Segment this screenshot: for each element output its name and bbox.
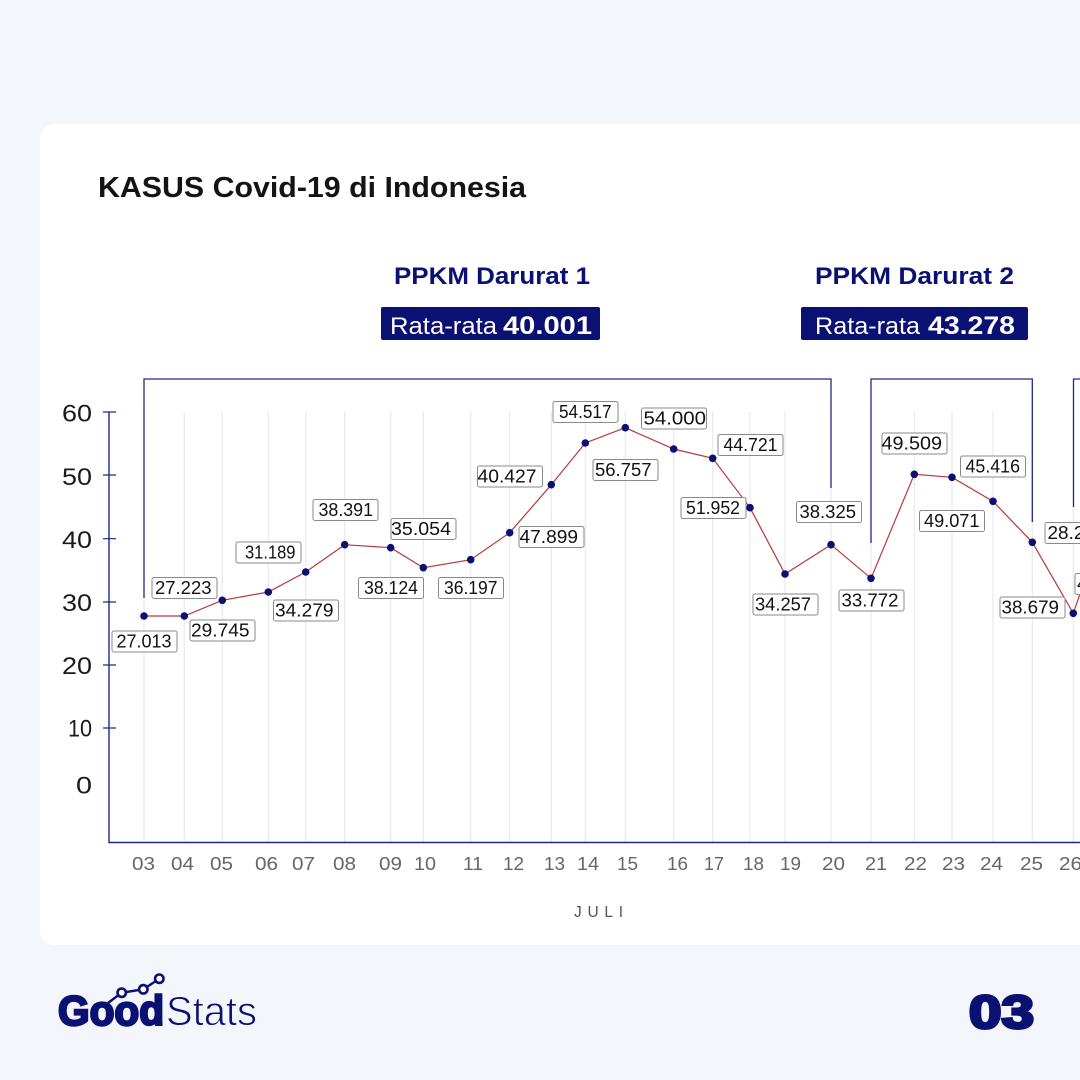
y axis: 40 bbox=[62, 527, 92, 554]
x axis labels: 10 bbox=[414, 853, 436, 874]
data labels: 44.721 bbox=[724, 435, 778, 455]
data labels: 56.757 bbox=[595, 460, 652, 480]
x axis labels: 06 bbox=[255, 853, 278, 874]
panel: chart card bbox=[40, 124, 1080, 945]
data labels: 49.071 bbox=[924, 511, 980, 531]
page number: 03 bbox=[969, 986, 1034, 1038]
heading: PPKM Darurat 1: 40.001 bbox=[503, 312, 592, 340]
data labels: 51.952 bbox=[686, 498, 740, 518]
x axis labels: 25 bbox=[1020, 853, 1043, 874]
data labels: 34.257 bbox=[755, 594, 811, 614]
x axis labels: 09 bbox=[379, 853, 402, 874]
x axis labels: 26 bbox=[1059, 853, 1080, 874]
heading: PPKM Darurat 2: PPKM Darurat 2 bbox=[815, 263, 1014, 290]
data labels: 27.223 bbox=[155, 578, 212, 598]
x axis labels: 08 bbox=[333, 853, 356, 874]
y axis bbox=[62, 400, 1080, 842]
logo: GoodStats bbox=[58, 974, 257, 1034]
title: KASUS Covid-19 di Indonesia bbox=[98, 172, 527, 204]
y axis: 20 bbox=[62, 653, 92, 680]
data line bbox=[144, 428, 1080, 616]
bracket: next period bbox=[1074, 379, 1080, 507]
heading: PPKM Darurat 1 bbox=[381, 263, 600, 340]
heading: PPKM Darurat 1: Rata-rata bbox=[390, 313, 498, 340]
x axis labels: 12 bbox=[503, 853, 524, 874]
y axis: 30 bbox=[62, 590, 92, 617]
x axis labels: 23 bbox=[942, 853, 965, 874]
data labels: 38.325 bbox=[800, 502, 856, 522]
data labels: 38.391 bbox=[318, 500, 373, 520]
data labels: 38.124 bbox=[364, 578, 418, 598]
data labels bbox=[112, 402, 1080, 652]
bracket: PPKM Darurat 2 period bbox=[871, 379, 1032, 543]
bracket: PPKM Darurat 1 period bbox=[144, 379, 831, 598]
data labels: 40.427 bbox=[478, 466, 536, 486]
x axis labels: 14 bbox=[577, 853, 599, 874]
x axis labels: 13 bbox=[544, 853, 565, 874]
y axis: 60 bbox=[62, 400, 92, 428]
heading: PPKM Darurat 2: 43.278 bbox=[928, 312, 1015, 340]
x axis labels: 17 bbox=[704, 853, 724, 874]
data labels: 54.000 bbox=[644, 408, 706, 428]
data labels: 34.279 bbox=[275, 600, 334, 620]
data labels: 27.013 bbox=[116, 632, 172, 652]
y axis: 0 bbox=[76, 772, 92, 800]
x axis labels: 19 bbox=[780, 853, 801, 874]
x axis labels: 20 bbox=[822, 853, 845, 874]
data labels: 49.509 bbox=[882, 434, 942, 454]
x axis labels: 05 bbox=[210, 853, 233, 874]
x axis labels: 15 bbox=[617, 853, 638, 874]
data labels: 54.517 bbox=[559, 402, 612, 422]
heading: PPKM Darurat 2: Rata-rata bbox=[815, 313, 921, 340]
data labels: 33.772 bbox=[842, 590, 898, 610]
x axis labels: 16 bbox=[667, 853, 688, 874]
data labels: 36.197 bbox=[444, 578, 498, 598]
data labels: 29.745 bbox=[191, 620, 250, 640]
data labels: 45.416 bbox=[966, 456, 1020, 476]
x axis labels: 24 bbox=[980, 853, 1003, 874]
data labels: 35.054 bbox=[391, 519, 451, 539]
data labels: 47.899 bbox=[520, 527, 578, 547]
x axis labels: 07 bbox=[292, 853, 315, 874]
x axis labels bbox=[132, 853, 1080, 874]
data labels: 38.679 bbox=[1002, 598, 1059, 618]
x axis labels: 21 bbox=[865, 853, 887, 874]
data points bbox=[140, 424, 1077, 620]
data labels: 31.189 bbox=[245, 542, 296, 562]
x axis labels: 22 bbox=[904, 853, 927, 874]
line chart bbox=[62, 379, 1080, 921]
x axis labels: 04 bbox=[171, 853, 194, 874]
x axis labels: 11 bbox=[463, 853, 483, 874]
x axis labels: 18 bbox=[743, 853, 764, 874]
heading: PPKM Darurat 1: PPKM Darurat 1 bbox=[394, 263, 590, 290]
logo: GoodStats: Good bbox=[58, 987, 164, 1034]
x axis title: JULI bbox=[574, 904, 623, 921]
x axis labels: 03 bbox=[132, 853, 155, 874]
heading: PPKM Darurat 2 bbox=[801, 263, 1028, 340]
y axis: 50 bbox=[62, 464, 92, 491]
logo: GoodStats: Stats bbox=[166, 988, 257, 1034]
y axis: 10 bbox=[68, 716, 92, 742]
